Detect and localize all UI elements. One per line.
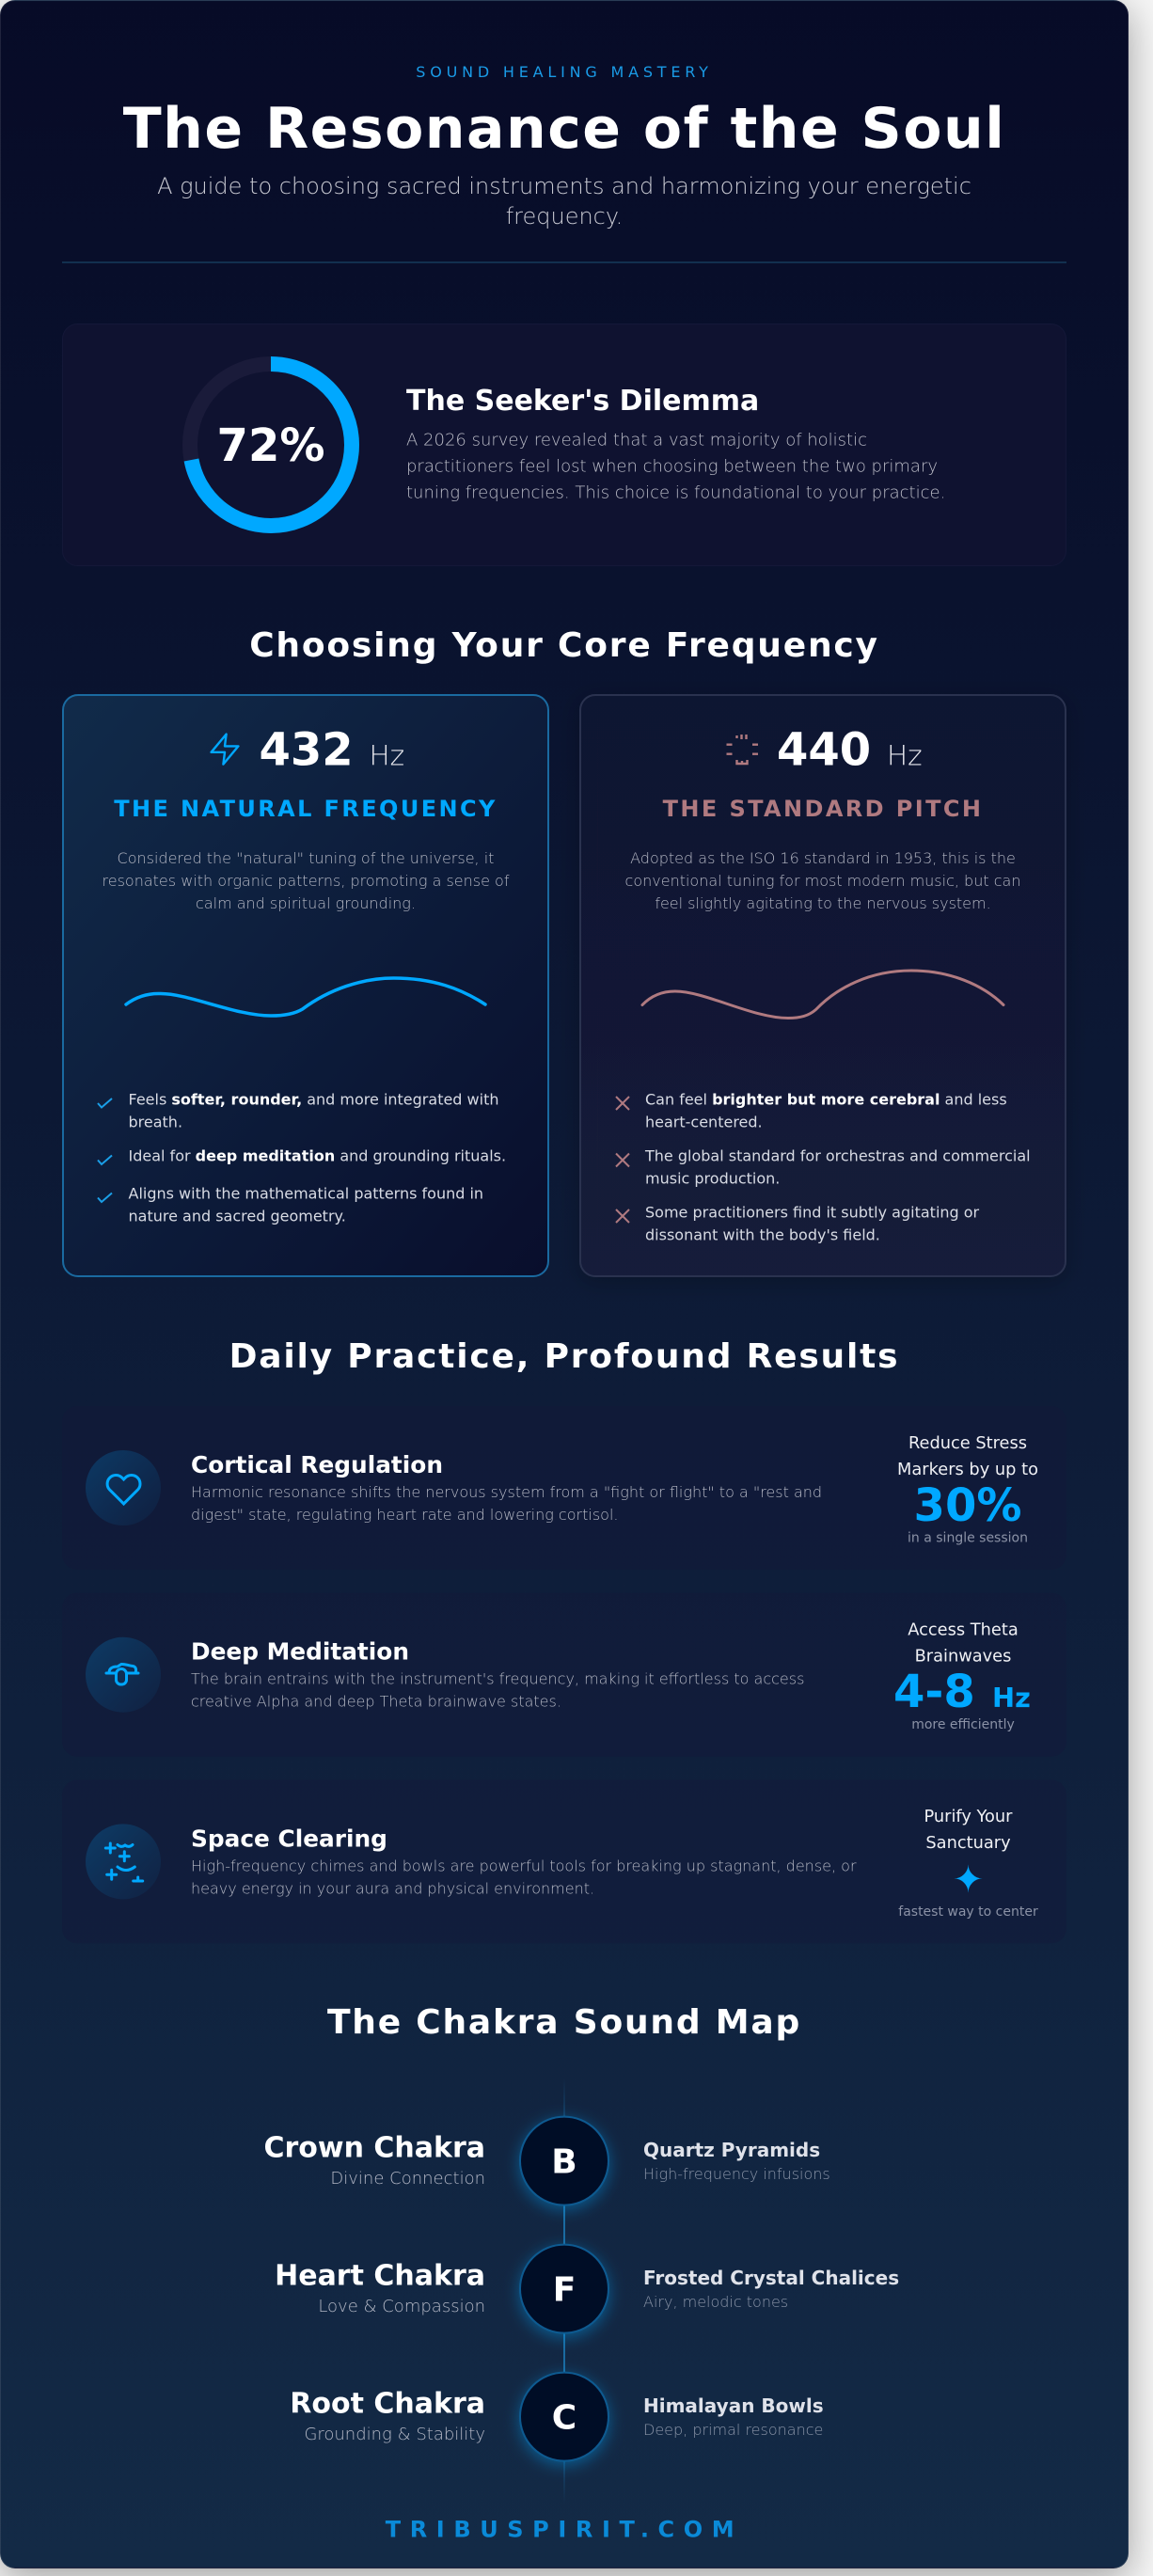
card description: conventional tuning for most modern music, but can — [625, 872, 1020, 890]
chakra row: crown: B — [551, 2142, 577, 2182]
row text: heavy energy in your aura and physical environment. — [191, 1879, 594, 1897]
chakra row: crown — [263, 2117, 830, 2205]
section heading: chakra map: The Chakra Sound Map — [327, 2003, 801, 2042]
eyebrow: SOUND HEALING MASTERY — [416, 63, 713, 81]
row text: The brain entrains with the instrument's frequency, making it effortless to access — [191, 1670, 804, 1688]
row text: digest" state, regulating heart rate and lowering cortisol. — [191, 1506, 618, 1524]
check icon — [98, 1193, 112, 1202]
chakra row: crown: Divine Connection — [330, 2169, 485, 2189]
section heading: daily practice: Daily Practice, Profound Results — [229, 1337, 899, 1376]
drawback 1: heart-centered. — [645, 1114, 763, 1130]
stat: 30%: Reduce Stress — [908, 1433, 1027, 1453]
stat: purify: ✦ — [953, 1858, 984, 1902]
subtitle: A guide to choosing sacred instruments and harmonizing your energetic — [157, 173, 971, 199]
row text: Harmonic resonance shifts the nervous system from a "fight or flight" to a "rest and — [191, 1483, 822, 1501]
stat: 30% — [897, 1433, 1038, 1546]
panel text: A 2026 survey revealed that a vast majority of holistic — [406, 431, 867, 450]
benefit 2: Ideal for deep meditation and grounding rituals. — [128, 1147, 506, 1164]
drawback 2: music production. — [645, 1170, 780, 1187]
wave: 440 Hz — [642, 971, 1003, 1018]
chakra row: root — [290, 2373, 824, 2461]
row title: Deep Meditation — [191, 1638, 409, 1666]
row text: creative Alpha and deep Theta brainwave states. — [191, 1693, 561, 1711]
donut chart: 72%: 72% — [217, 419, 324, 472]
chakra row: heart: F — [553, 2270, 576, 2310]
card title: THE NATURAL FREQUENCY — [114, 796, 498, 822]
card description: Considered the "natural" tuning of the universe, it — [118, 849, 494, 867]
stat: 4-8 Hz: more efficiently — [911, 1717, 1015, 1732]
card description: calm and spiritual grounding. — [196, 894, 416, 912]
frequency unit: Hz — [887, 739, 923, 771]
frequency value: 432 — [260, 723, 354, 776]
benefit 3: nature and sacred geometry. — [128, 1208, 346, 1225]
stat: purify — [898, 1807, 1038, 1920]
stat: 4-8 Hz: Brainwaves — [915, 1646, 1011, 1667]
cross icon — [616, 1209, 629, 1223]
chakra row: heart: Airy, melodic tones — [643, 2293, 788, 2311]
icon: heart — [86, 1450, 161, 1525]
header — [123, 63, 1005, 229]
icon: meditation — [86, 1637, 161, 1713]
check icon — [98, 1098, 112, 1108]
panel: 432 Hz — [63, 695, 548, 1276]
panel text: tuning frequencies. This choice is foundational to your practice. — [406, 483, 945, 502]
frequency value: 440 — [777, 723, 871, 776]
chakra row: root: Himalayan Bowls — [643, 2394, 824, 2417]
connector line — [563, 2078, 565, 2504]
panel: the seeker's dilemma — [62, 324, 1066, 566]
chakra row: root: C — [552, 2398, 576, 2438]
chakra row: heart: Love & Compassion — [318, 2297, 485, 2316]
stat: purify: fastest way to center — [898, 1904, 1038, 1920]
drawback 1: Can feel brighter but more cerebral and less — [645, 1091, 1007, 1108]
card description: Adopted as the ISO 16 standard in 1953, this is the — [630, 849, 1016, 867]
check icon — [98, 1155, 112, 1164]
panel heading: The Seeker's Dilemma — [406, 385, 759, 418]
wave: 432 Hz — [126, 978, 485, 1016]
chakra row: root: Deep, primal resonance — [643, 2421, 823, 2439]
row: cortical regulation — [62, 1406, 1066, 1570]
frequency unit: Hz — [369, 739, 404, 771]
panel: 440 Hz — [580, 695, 1066, 1276]
stat: 30%: in a single session — [908, 1531, 1028, 1546]
drawbacks list — [616, 1091, 1031, 1243]
row: space clearing — [62, 1779, 1066, 1943]
card description: resonates with organic patterns, promoting a sense of — [103, 872, 510, 890]
subtitle: frequency. — [506, 203, 623, 229]
drawback 3: Some practitioners find it subtly agitating or — [645, 1204, 979, 1221]
icon: lightning bolt — [212, 735, 238, 765]
chakra row: crown: Quartz Pyramids — [643, 2139, 820, 2161]
card title: THE STANDARD PITCH — [663, 796, 983, 822]
card description: feel slightly agitating to the nervous system. — [655, 894, 991, 912]
title: The Resonance of the Soul — [123, 96, 1005, 162]
panel text: practitioners feel lost when choosing between the two primary — [406, 457, 938, 476]
stat: 4-8 Hz: Hz — [992, 1682, 1031, 1714]
icon: sparkles — [86, 1824, 161, 1899]
donut chart: 72% — [190, 364, 352, 526]
row title: Cortical Regulation — [191, 1451, 443, 1478]
row: deep meditation — [62, 1593, 1066, 1757]
chakra row: crown: High-frequency infusions — [643, 2165, 830, 2183]
cross icon — [616, 1097, 629, 1110]
chakra row: heart: Frosted Crystal Chalices — [643, 2267, 899, 2289]
stat: purify: Purify Your — [924, 1807, 1013, 1826]
stat: 4-8 Hz: Access Theta — [908, 1620, 1019, 1640]
chakra map — [263, 2078, 899, 2504]
stat: 4-8 Hz: 4-8 — [893, 1666, 975, 1718]
chakra row: root: Root Chakra — [290, 2388, 485, 2421]
chakra row: crown: Crown Chakra — [263, 2132, 485, 2165]
section heading: core frequency: Choosing Your Core Frequency — [249, 626, 879, 665]
benefit 1: Feels softer, rounder, and more integrated with — [128, 1091, 498, 1108]
row title: Space Clearing — [191, 1825, 387, 1852]
benefits list — [98, 1091, 506, 1225]
benefit 1: breath. — [128, 1114, 182, 1130]
chakra row: root: Grounding & Stability — [304, 2425, 485, 2444]
benefit 3: Aligns with the mathematical patterns found in — [128, 1185, 483, 1202]
drawback 2: The global standard for orchestras and commercial — [645, 1147, 1031, 1164]
chakra row: heart: Heart Chakra — [275, 2260, 485, 2293]
stat: purify: Sanctuary — [925, 1833, 1011, 1853]
stat: 30%: 30% — [914, 1479, 1021, 1532]
row text: High-frequency chimes and bowls are powerful tools for breaking up stagnant, dense, or — [191, 1857, 857, 1874]
chakra row: heart — [275, 2245, 899, 2333]
icon: dashed pitch ring — [726, 735, 758, 764]
drawback 3: dissonant with the body's field. — [645, 1226, 880, 1243]
footer brand: TRIBUSPIRIT.COM — [386, 2517, 743, 2543]
stat: 4-8 Hz — [893, 1620, 1031, 1732]
stat: 30%: Markers by up to — [897, 1460, 1038, 1479]
cross icon — [616, 1153, 629, 1166]
